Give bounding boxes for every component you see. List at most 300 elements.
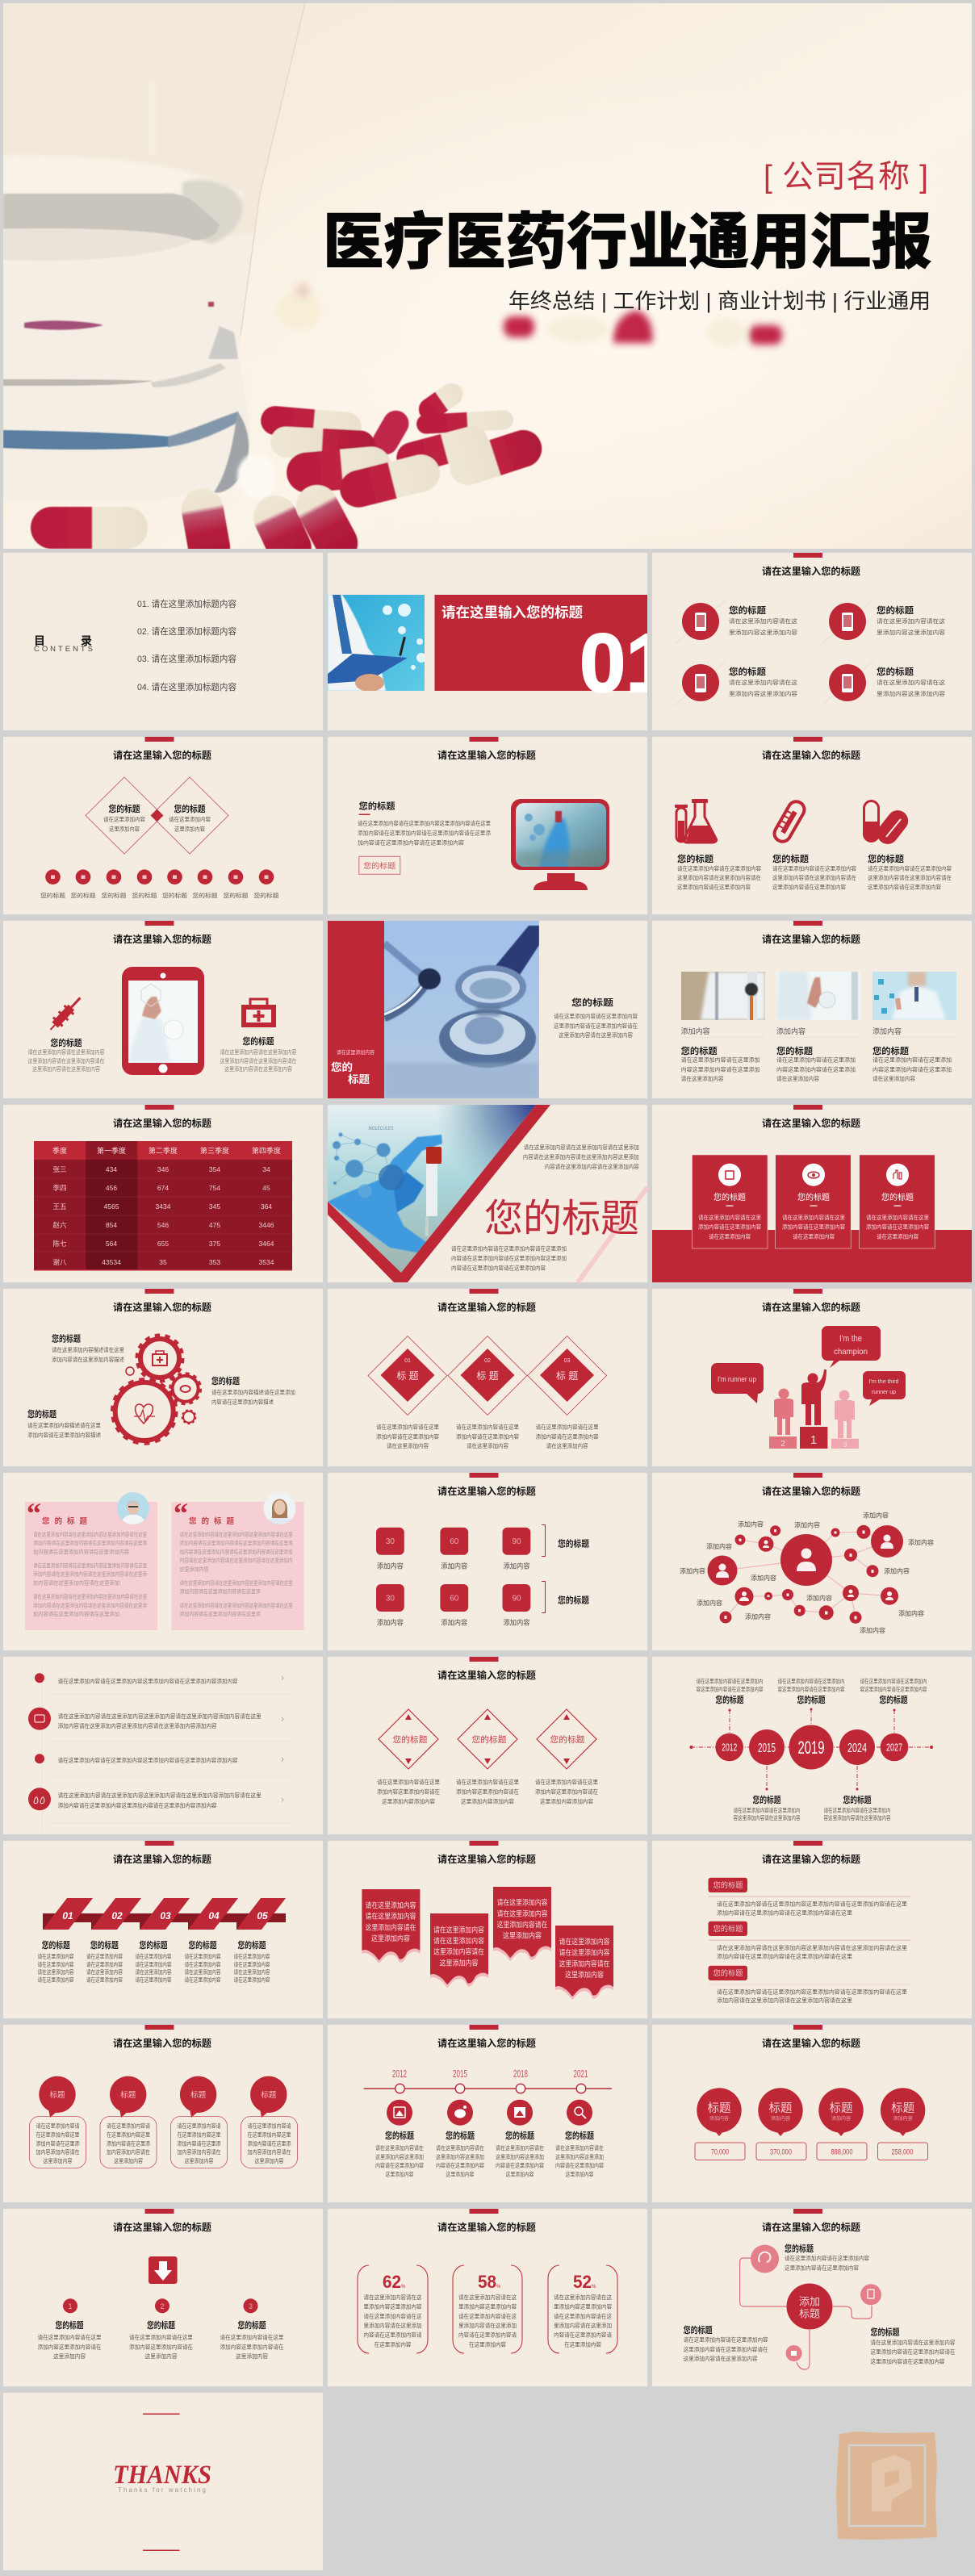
card left: 您的标题 — [42, 1516, 87, 1526]
text block 3 — [27, 1408, 101, 1439]
text block 1: 添加内容请在这里添加内容描述 — [52, 1356, 124, 1363]
network labels: 添加内容 — [680, 1567, 705, 1575]
column 2: 请在这里添加内容请 — [107, 2122, 150, 2130]
image: gloved hand holding blood tube — [328, 1105, 538, 1274]
lower text — [451, 1245, 567, 1271]
tag block 3: 请在这里添加内容请在这里添加内容这里添加内容请在这里添加内容请在这里 — [717, 1988, 907, 1996]
column 4: 在这里添加内容这里 — [247, 2131, 291, 2138]
milestone 2: 内容请在这里添加内容 — [436, 2162, 484, 2169]
table rows: 3534 — [259, 1258, 274, 1266]
bubble: third: runner up — [872, 1388, 896, 1395]
captions: 这里添加内容添加内容 — [461, 1797, 514, 1804]
lower labels — [733, 1794, 891, 1821]
panel: four phone items — [652, 553, 972, 730]
captions: 这里添加内容添加内容 — [382, 1797, 435, 1804]
tab — [793, 737, 822, 742]
step column 4: 您的标题 — [189, 1939, 216, 1951]
tag block 2: 请在这里添加内容请在这里添加内容这里添加内容请在这里添加内容请在这里 — [717, 1944, 907, 1951]
text left: 这里添加内容请在这里添加内容 — [684, 2355, 758, 2362]
node C — [786, 2345, 802, 2361]
diamond 02: 标 题 — [476, 1370, 499, 1382]
heading: 请在这里输入您的标题 — [437, 2221, 536, 2233]
text block 3: 添加内容请在这里添加内容描述 — [27, 1432, 101, 1439]
milestone 2 — [436, 2100, 484, 2178]
tab — [470, 1289, 499, 1294]
heading: 请在这里输入您的标题 — [113, 2037, 211, 2049]
column 2: 您的标题 — [772, 853, 809, 864]
captions: 请在这里添加内容请在这里 — [377, 1779, 440, 1786]
step 2: 您的标题 — [147, 2319, 175, 2331]
card 2: 您的标题 — [797, 1192, 830, 1202]
column 3: 这里添加内容请在这里添加内容 — [868, 884, 941, 891]
text block 1 — [52, 1333, 124, 1363]
milestone 1: 这里添加内容 — [386, 2171, 413, 2178]
captions: 请在这里添加内容 — [387, 1442, 429, 1449]
podium 3: 3 — [843, 1441, 847, 1449]
right text — [554, 997, 638, 1039]
diamond 2: 您的标题 — [471, 1734, 507, 1745]
column 2 — [772, 853, 856, 891]
column 4 — [241, 2076, 297, 2168]
podium 2: 2 — [780, 1440, 785, 1449]
panel: hero cover — [3, 3, 972, 577]
diamond 03: 标 题 — [556, 1370, 578, 1382]
item 1: 里添加内容这里添加内容 — [729, 629, 797, 636]
tile row 1: 添加内容 — [377, 1562, 404, 1570]
panel: monitor slide — [328, 737, 647, 914]
diamond 2 — [458, 1709, 517, 1769]
right text: 您的标题 — [571, 997, 613, 1008]
column 2: 您的标题 — [776, 1045, 813, 1056]
column 1: 添加内容请在这里添 — [36, 2139, 79, 2147]
tab — [145, 1841, 174, 1846]
diamond 1: 您的标题 — [392, 1734, 428, 1745]
panel: glove and sample slide — [328, 1105, 647, 1282]
captions: 添加内容请在这里添加内容 — [376, 1432, 439, 1440]
tile row 2: 90 — [512, 1595, 521, 1603]
network labels: 添加内容 — [738, 1520, 764, 1528]
tag block 2: 添加内容请在这里添加内容请在这里添加内容请在这里 — [717, 1953, 852, 1960]
hub circle: 标题 — [799, 2308, 820, 2320]
top rule — [143, 2413, 179, 2415]
network links — [722, 1531, 889, 1617]
panel: network diagram — [652, 1473, 972, 1650]
icon labels: 您的标题 — [223, 892, 249, 899]
column 1: 请在这里添加内容请在这里添加 — [681, 1056, 760, 1064]
ribbon step 01 — [43, 1898, 93, 1930]
table rows: 45 — [262, 1184, 270, 1192]
tab — [793, 2209, 822, 2214]
table rows: 陈七 — [52, 1240, 67, 1248]
diamond right: 您的标题 — [174, 803, 205, 814]
banner 3: 请在这里添加内容 — [497, 1898, 547, 1907]
pin 2 — [756, 2088, 806, 2160]
banner 3: 这里添加内容请在 — [497, 1920, 547, 1929]
text right: 这里添加内容请在这里添加内容请在 — [870, 2348, 956, 2356]
item 3: 里添加内容这里添加内容 — [729, 690, 797, 697]
card left: 加内容请在这里添加内容请在这里添加内容 — [33, 1548, 129, 1555]
section title: 请在这里输入您的标题 — [441, 604, 583, 621]
upper labels: 您的标题 — [880, 1694, 907, 1705]
tile row 1: 60 — [450, 1537, 459, 1546]
pin 3: 标题 — [830, 2101, 852, 2115]
table rows: 35 — [159, 1258, 167, 1266]
year circles: 2019 — [797, 1738, 825, 1758]
item 3 — [675, 661, 797, 705]
table header — [52, 1146, 281, 1155]
heading: 请在这里输入您的标题 — [113, 749, 211, 761]
heading: 请在这里输入您的标题 — [437, 1853, 536, 1865]
body text — [358, 820, 491, 847]
card left: 请在这里添加内容请在这里添加内容这里添加内容请在这里 — [33, 1530, 147, 1537]
step 1: 这里添加内容 — [53, 2352, 86, 2360]
stat 58 percent: 里添加内容请在这里添加 — [458, 2322, 517, 2329]
upper labels: 您的标题 — [715, 1694, 744, 1705]
card 1: 请在这里添加内容请在这里 — [698, 1214, 761, 1221]
card right — [172, 1497, 304, 1630]
network labels: 添加内容 — [751, 1574, 776, 1582]
left text: 这里添加内容请在这里添加内容 — [32, 1065, 100, 1073]
button — [359, 856, 400, 874]
table rows: 354 — [209, 1165, 220, 1173]
ribbon step 05: 05 — [257, 1910, 268, 1922]
bubble: champion: champion — [834, 1347, 868, 1357]
tile row 1: 添加内容 — [504, 1562, 530, 1570]
photo 2 — [776, 972, 860, 1020]
table rows: 456 — [106, 1184, 117, 1192]
text block 3: 请在这里添加内容描述请在这里 — [27, 1422, 101, 1429]
card right: 添加内容请在这里添加内容请在这里添 — [180, 1610, 261, 1617]
list item 4 — [28, 1788, 283, 1810]
pin 1: 标题 — [707, 2101, 731, 2115]
heading: 请在这里输入您的标题 — [437, 1301, 536, 1313]
banner 2: 请在这里添加内容 — [433, 1925, 484, 1934]
thanks wordmark: THANKS — [113, 2461, 211, 2490]
step column 5: 请在这里添加内容 — [234, 1953, 270, 1960]
figure: champion — [801, 1370, 826, 1425]
contents list: 03. 请在这里添加标题内容 — [137, 653, 236, 664]
panel: icon list slide — [3, 1657, 323, 1834]
captions: 请在这里添加内容请在这里 — [376, 1423, 439, 1430]
stat 62 percent: 请在这里添加内容请在这 — [363, 2312, 421, 2319]
heading: 请在这里输入您的标题 — [437, 749, 536, 761]
list item 1 — [35, 1673, 283, 1684]
body text: 加内容请在这里添加内容请在这里添加内容 — [358, 839, 464, 847]
stat 62 percent: 请在这里添加内容请在这 — [363, 2294, 421, 2301]
icon: syringe — [46, 993, 85, 1034]
step column 3: 请在这里添加内容 — [136, 1960, 171, 1968]
column 3: 请在这里添加内容请 — [178, 2122, 221, 2130]
column 1 — [677, 853, 761, 891]
red sidebar: 标题 — [348, 1073, 370, 1085]
step 1: 1 — [68, 2302, 73, 2310]
heading: 请在这里输入您的标题 — [113, 2221, 211, 2233]
ribbon step 04 — [188, 1898, 238, 1930]
column 1: 这里添加内容 — [44, 2157, 73, 2164]
banner 2: 这里添加内容 — [439, 1958, 478, 1967]
gear top — [137, 1336, 182, 1381]
panel: three photo columns — [652, 921, 972, 1098]
tag block 1: 添加内容请在这里添加内容请在这里添加内容请在这里 — [717, 1909, 852, 1916]
panel: hub with connectors — [652, 2209, 972, 2386]
stat 52 percent: 里添加内容这里添加内容 — [554, 2303, 612, 2310]
step column 5 — [234, 1939, 270, 1984]
column 3: 请在这里添加内容 — [872, 1075, 915, 1082]
network labels: 添加内容 — [745, 1612, 771, 1620]
card 1: 您的标题 — [713, 1192, 746, 1202]
text right: 这里添加内容请在这里添加内容 — [870, 2357, 944, 2365]
stat 58 percent: 内容请在这里添加内容请 — [458, 2331, 517, 2339]
figure: third — [835, 1390, 855, 1438]
network labels: 添加内容 — [706, 1542, 732, 1550]
step 1: 请在这里添加内容请在这里 — [37, 2333, 102, 2340]
ribbon back band — [43, 1913, 286, 1930]
tab — [793, 2025, 822, 2030]
heading: 请在这里输入您的标题 — [113, 933, 211, 945]
card right: 您的标题 — [189, 1516, 234, 1526]
ribbon step 01: 01 — [62, 1910, 73, 1922]
podium 3 — [831, 1439, 859, 1449]
upper labels — [696, 1678, 927, 1705]
banner 4: 这里添加内容请在 — [559, 1959, 610, 1968]
red accent — [358, 813, 370, 815]
captions: 请在这里添加内容请在这里 — [535, 1779, 598, 1786]
tag block 3 — [709, 1966, 910, 2004]
watermark stamp — [836, 2432, 937, 2540]
left text: 请在这里添加内容请在这里添加内容 — [27, 1048, 105, 1056]
upper text — [523, 1144, 639, 1170]
step 1 — [37, 2298, 102, 2360]
hub circle — [786, 2284, 833, 2329]
card left: “ — [27, 1497, 41, 1529]
icon row — [45, 869, 274, 884]
card right: 请在这里添加内容请在这里添加内容这里添加内容请在这里 — [180, 1601, 293, 1608]
line end markers — [689, 1708, 933, 1790]
heading: 请在这里输入您的标题 — [762, 749, 860, 761]
diamond 01: 01 — [404, 1358, 411, 1364]
tab — [470, 1473, 499, 1478]
tab — [793, 1289, 822, 1294]
icon labels: 您的标题 — [253, 892, 279, 899]
tile row 1: 90 — [512, 1537, 521, 1546]
item 4 — [822, 661, 945, 705]
bubble: champion: I'm the — [839, 1334, 862, 1344]
milestone 4: 内容请在这里添加内容 — [555, 2162, 604, 2169]
stat 52 percent: 请在这里添加内容请在这 — [554, 2312, 612, 2319]
text block 2: 您的标题 — [211, 1375, 240, 1386]
stat 58 percent — [453, 2265, 522, 2353]
panel: ribbon steps — [3, 1841, 323, 2018]
column 2: 这里添加内容请在这里添加内容请在 — [772, 874, 856, 881]
captions: 请在这里添加内容 — [546, 1442, 588, 1449]
right text: 这里添加内容请在这里添加内容请在 — [554, 1022, 638, 1030]
panel: three outlined diamonds — [328, 1657, 647, 1834]
column 4: 添加内容请在这里添 — [247, 2139, 291, 2147]
network labels: 添加内容 — [898, 1609, 924, 1617]
column 1: 这里添加内容请在这里添加内容 — [677, 884, 751, 891]
step column 2: 请在这里添加内容 — [86, 1968, 123, 1976]
table rows: 王五 — [52, 1202, 67, 1211]
thanks subtitle: Thanks for watching — [118, 2486, 206, 2494]
icon labels — [40, 892, 279, 899]
image: water glass — [3, 3, 305, 500]
column 1 — [681, 1027, 764, 1082]
icon: thermometer — [772, 799, 807, 844]
banner 2 — [430, 1913, 488, 1988]
tab — [470, 2025, 499, 2030]
heading: 请在这里输入您的标题 — [762, 2221, 860, 2233]
stat 62 percent: 里添加内容这里添加内容 — [363, 2303, 421, 2310]
ribbon step 03 — [140, 1898, 190, 1930]
tile row 2: 添加内容 — [377, 1618, 404, 1626]
step 2: 请在这里添加内容请在这里 — [129, 2333, 193, 2340]
ribbon step 05 — [236, 1898, 286, 1930]
lower labels: 请在这里添加内容请在这里添加内 — [823, 1806, 891, 1813]
heading: 请在这里输入您的标题 — [437, 1485, 536, 1497]
icon labels: 您的标题 — [40, 892, 65, 899]
panel: stethoscope slide — [328, 921, 647, 1098]
step 2 — [129, 2298, 193, 2360]
photo 1 — [681, 972, 765, 1020]
card left: 请在这里添加内容请在这里添加内容这里添加内容请在这里 — [33, 1562, 147, 1569]
card 3 — [860, 1155, 935, 1248]
card 2: 请在这里添加内容 — [793, 1232, 835, 1240]
item 2: 里添加内容这里添加内容 — [877, 629, 945, 636]
table header: 第二季度 — [149, 1146, 178, 1155]
heading: 请在这里输入您的标题 — [762, 1485, 860, 1497]
years — [392, 2068, 588, 2080]
heading: contents: 目 录 — [34, 634, 92, 647]
card right: 添加内容请在这里添加内容请在这里添加内容请在这里添 — [180, 1539, 293, 1546]
table rows: 346 — [157, 1165, 169, 1173]
stat 52 percent: 里添加内容请在这里添加 — [554, 2322, 612, 2329]
left text: 这里添加内容请在这里添加内容请在 — [27, 1057, 105, 1064]
step column 4: 请在这里添加内容 — [184, 1976, 221, 1984]
banner 2: 这里添加内容请在 — [433, 1947, 484, 1956]
upper text: 内容请在这里添加内容请在这里添加内容 — [545, 1163, 639, 1170]
milestone 3: 您的标题 — [505, 2130, 534, 2141]
icon: down arrow tile — [149, 2256, 178, 2284]
pin 4: 标题 — [891, 2101, 914, 2115]
item 3: 您的标题 — [729, 666, 766, 677]
tab — [470, 2209, 499, 2214]
connectors — [740, 2258, 872, 2369]
panel: podium slide — [652, 1289, 972, 1466]
table header: 第四季度 — [252, 1146, 281, 1155]
left text — [27, 1037, 105, 1073]
upper labels: 容这里添加内容请在这里添加内容 — [778, 1685, 844, 1692]
step 3: 这里添加内容 — [236, 2352, 268, 2360]
tab — [793, 1473, 822, 1478]
diamond 3: 您的标题 — [550, 1734, 585, 1745]
pin 2: 标题 — [768, 2101, 793, 2115]
step 3: 3 — [249, 2302, 253, 2310]
table rows: 854 — [106, 1221, 117, 1229]
column 2: 请在这里添加内容 — [776, 1075, 819, 1082]
card right: 内容请在这里添加内容请在这里添加内容请在这里添加内 — [180, 1557, 293, 1564]
stat 62 percent: 在这里添加内容 — [375, 2340, 412, 2348]
main title: 医疗医药行业通用汇报 — [323, 208, 932, 277]
table rows: 4565 — [104, 1202, 119, 1211]
heading: 请在这里输入您的标题 — [762, 2037, 860, 2049]
lower labels: 请在这里添加内容请在这里添加内 — [733, 1806, 801, 1813]
tile row 1 — [376, 1528, 530, 1570]
tag block 2: 您的标题 — [713, 1924, 743, 1933]
step column 5: 您的标题 — [237, 1939, 266, 1951]
pin 4: 添加内容 — [893, 2115, 913, 2122]
column 3: 这里添加内容 — [184, 2157, 213, 2164]
card left — [25, 1497, 157, 1630]
column 2: 在这里添加内容这里 — [107, 2131, 150, 2138]
upper text: 内容请在这里添加内容请在这里添加内容这里添加 — [523, 1153, 639, 1160]
step column 2: 请在这里添加内容 — [86, 1953, 123, 1960]
lower labels: 容这里添加内容请在这里添加内容 — [733, 1814, 801, 1821]
list item 4: 请在这里添加内容请在这里添加内容这里添加内容请在这里添加内容添加内容请在这里 — [58, 1792, 262, 1799]
card left: 加内容请在这里添加内容请在这里添加 — [33, 1579, 119, 1586]
captions: 请在这里添加内容请在这里 — [536, 1423, 599, 1430]
diamond right: 这里添加内容 — [174, 825, 205, 833]
text top: 您的标题 — [785, 2243, 814, 2254]
text left: 这里添加内容请在这里添加内容请在 — [684, 2345, 768, 2352]
table header: 季度 — [52, 1146, 67, 1155]
table rows: 3434 — [156, 1202, 171, 1211]
year circles: 2015 — [758, 1742, 776, 1755]
tab — [470, 1657, 499, 1662]
tab — [470, 1841, 499, 1846]
stat 62 percent: 62 — [383, 2272, 401, 2292]
timeline axis — [364, 2084, 612, 2093]
table rows: 赵六 — [52, 1221, 67, 1229]
milestone 3: 请在这里添加内容请在 — [496, 2144, 544, 2152]
network labels: 添加内容 — [884, 1566, 910, 1574]
diamond 3 — [537, 1709, 596, 1769]
captions: 请在这里添加内容请在这里 — [456, 1423, 519, 1430]
right text: 这里添加内容请在这里添加内容 — [224, 1065, 292, 1073]
tab — [145, 921, 174, 926]
milestone 3 — [496, 2100, 544, 2178]
diamond 02: 02 — [484, 1358, 491, 1364]
column 3: 请在这里添加内容请在这里添加内容 — [868, 864, 952, 872]
column 2: 内容这里添加内容请在这里添加 — [776, 1065, 856, 1073]
column 1: 在这里添加内容这里 — [36, 2131, 79, 2138]
figure: runner up — [774, 1388, 793, 1435]
gear big — [112, 1380, 176, 1443]
pin 4 — [878, 2088, 928, 2160]
tab — [793, 553, 822, 558]
diamond left — [86, 777, 163, 854]
company name: [ 公司名称 ] — [764, 160, 928, 194]
table rows: 李四 — [52, 1184, 67, 1192]
stat 62 percent: 内容请在这里添加内容请 — [363, 2331, 421, 2339]
column 1: 您的标题 — [677, 853, 713, 864]
diamond left: 请在这里添加内容 — [103, 815, 145, 823]
stat 52 percent — [548, 2265, 617, 2353]
year circles: 2027 — [886, 1742, 902, 1753]
table rows: 674 — [157, 1184, 169, 1192]
milestone 1: 内容请在这里添加内容 — [375, 2162, 424, 2169]
ring small a — [126, 1367, 134, 1375]
step column 1: 您的标题 — [42, 1939, 70, 1951]
captions: 请在这里添加内容 — [467, 1442, 508, 1449]
milestone 1: 请在这里添加内容请在 — [375, 2144, 424, 2152]
step column 1: 请在这里添加内容 — [37, 1976, 74, 1984]
card 2 — [776, 1155, 851, 1248]
tab — [793, 1841, 822, 1846]
stat 58 percent: 请在这里添加内容请在这 — [458, 2312, 517, 2319]
stat 52 percent: 52 — [573, 2272, 592, 2292]
tab — [470, 737, 499, 742]
upper labels: 请在这里添加内容请在这里添加内 — [778, 1678, 844, 1685]
